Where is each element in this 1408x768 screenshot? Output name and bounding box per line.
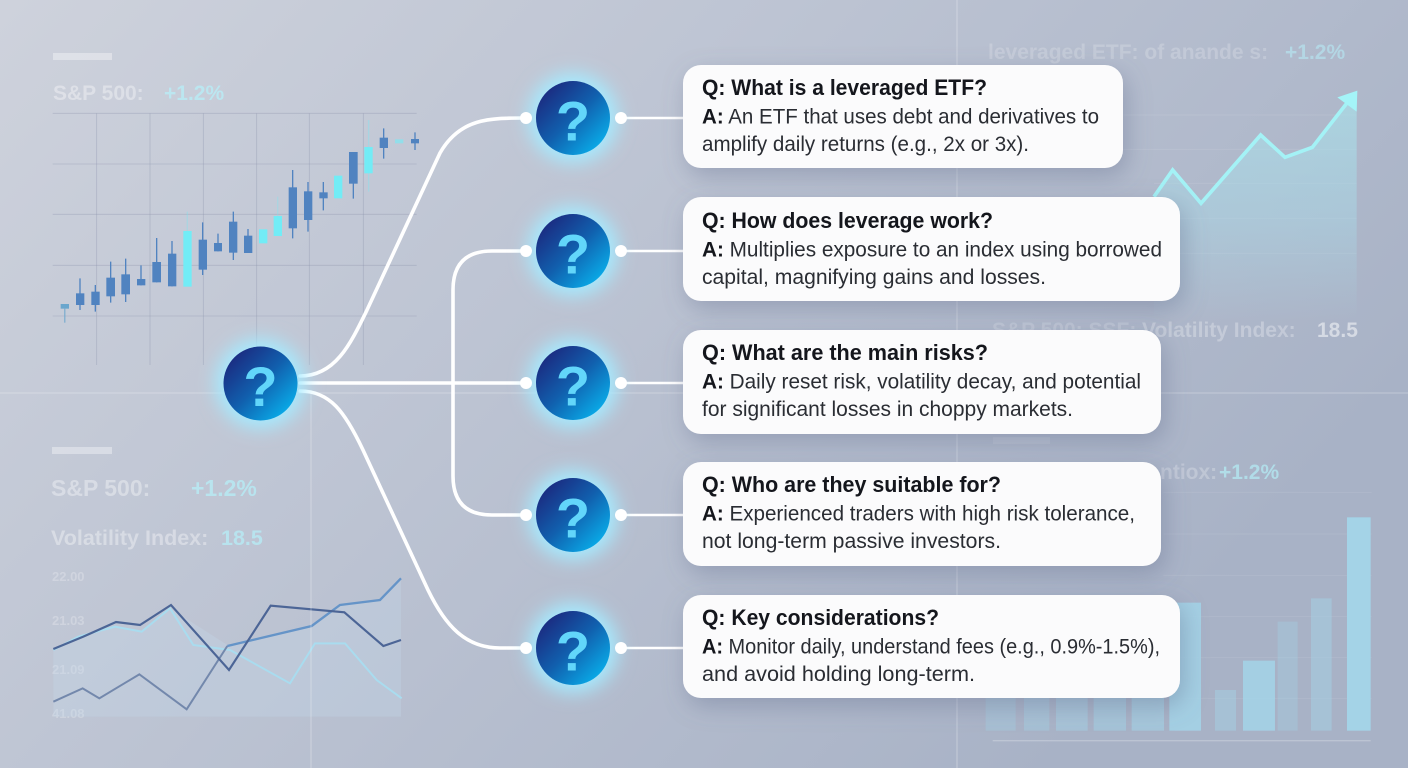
line chart panel [51, 447, 402, 721]
axis labels: 41.08 [52, 706, 85, 721]
card 1: what is a leveraged ETF [683, 65, 1123, 168]
label: S&P 500 top: S&P 500: [53, 82, 144, 105]
card 5: key considerations: Q: Key considerations? [702, 605, 939, 630]
bottom right bar chart panel [986, 437, 1372, 741]
card 2: how does leverage work: A: Multiplies exposure to an index using borrowed [702, 238, 1162, 262]
top right area chart panel [988, 41, 1357, 320]
header bar [53, 53, 112, 60]
card 4: who are they suitable for: not long-term passive investors. [702, 529, 1001, 553]
question node 5: ? [556, 620, 590, 682]
axis labels [52, 569, 85, 721]
mid right text: 18.5 [1317, 319, 1358, 342]
label: leveraged ETF: leveraged ETF: of anande s: [988, 41, 1268, 64]
question node 4: ? [556, 486, 590, 550]
card 2: how does leverage work: Q: How does leverage work? [702, 208, 993, 233]
label: ratio: ntiox: [1160, 461, 1217, 484]
question node 3: ? [556, 354, 590, 418]
question node 5 [520, 603, 627, 693]
question node 1: ? [556, 90, 590, 152]
label: ratio: +1.2% [1219, 461, 1279, 484]
candlestick grid and candles [53, 113, 419, 365]
label: leveraged ETF: +1.2% [1285, 41, 1345, 64]
card 5: key considerations: and avoid holding long-term. [702, 662, 975, 686]
card 4: who are they suitable for [683, 462, 1161, 566]
question node 1 [520, 73, 627, 163]
card 1: what is a leveraged ETF: A: An ETF that uses debt and derivatives to [702, 104, 1099, 128]
card 1: what is a leveraged ETF: amplify daily returns (e.g., 2x or 3x). [702, 132, 1029, 156]
header bar [52, 447, 112, 454]
card 4: who are they suitable for: A: Experienced traders with high risk tolerance, [702, 502, 1135, 526]
card 2: how does leverage work [683, 197, 1180, 301]
connector lines [300, 118, 683, 648]
line chart series [53, 578, 402, 717]
label: Volatility Index: 18.5 [221, 526, 263, 550]
card 5: key considerations: A: Monitor daily, understand fees (e.g., 0.9%-1.5%), [702, 634, 1160, 658]
central question node: ? [243, 355, 278, 418]
label: S&P 500: S&P 500: [51, 475, 150, 501]
label: Volatility Index: Volatility Index: [51, 526, 208, 550]
bar chart [986, 492, 1372, 741]
card 3: main risks: for significant losses in choppy markets. [702, 397, 1073, 421]
mid right text: Volatility Index: [1142, 319, 1296, 342]
card 1: what is a leveraged ETF: Q: What is a leveraged ETF? [702, 75, 987, 100]
question node 2: ? [556, 222, 590, 286]
question node 2 [520, 206, 627, 296]
area chart [1123, 91, 1357, 320]
card 3: main risks: A: Daily reset risk, volatility decay, and potential [702, 370, 1141, 394]
card 4: who are they suitable for: Q: Who are they suitable for? [702, 472, 1001, 497]
card 5: key considerations [683, 595, 1180, 698]
card 3: main risks [683, 330, 1161, 434]
card 3: main risks: Q: What are the main risks? [702, 340, 988, 365]
axis labels: 21.09 [52, 662, 85, 677]
central question node [216, 338, 306, 428]
mid right text: S&P 500: SSF: [992, 319, 1136, 342]
axis labels: 22.00 [52, 569, 85, 584]
axis labels: 21.03 [52, 613, 85, 628]
candlestick chart panel [53, 53, 419, 365]
question node 3 [520, 338, 627, 428]
card 2: how does leverage work: capital, magnifying gains and losses. [702, 265, 1046, 289]
header bar [993, 437, 1050, 444]
question node 4 [520, 470, 627, 560]
label: S&P 500 top: +1.2% [164, 82, 224, 105]
label: S&P 500: +1.2% [191, 475, 257, 501]
